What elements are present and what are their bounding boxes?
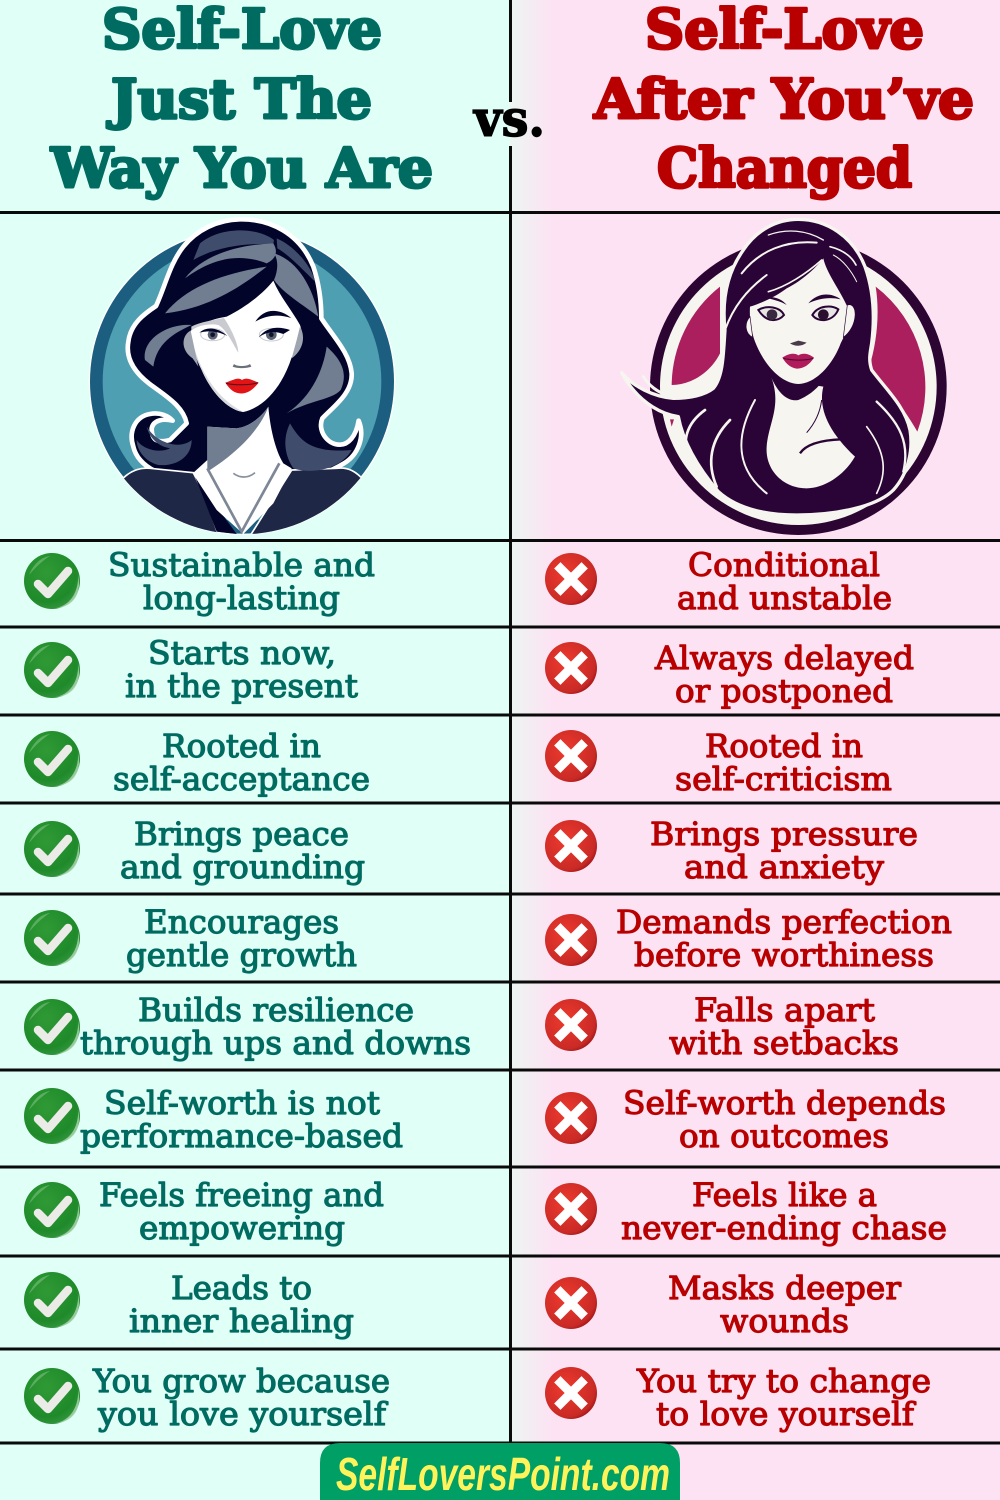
text: right — [623, 1084, 946, 1155]
text: left — [80, 1084, 403, 1155]
text: right: or postponed — [675, 672, 893, 710]
website text: SelfLoversPoint.com — [336, 1448, 670, 1500]
text: left: self-acceptance — [113, 760, 370, 798]
text: left — [120, 815, 365, 886]
text: left: through ups and downs — [80, 1024, 471, 1062]
icon: check — [24, 1272, 80, 1328]
text: right: on outcomes — [679, 1117, 889, 1155]
text: right — [675, 727, 892, 798]
heading: right title: Changed — [657, 136, 912, 200]
icon: cross — [545, 1277, 597, 1329]
icon: check — [24, 999, 80, 1055]
text: left: empowering — [139, 1209, 345, 1247]
eyes — [758, 307, 784, 320]
row 2 — [24, 634, 914, 710]
text: left: in the present — [125, 667, 358, 705]
heading: left title: Way You Are — [50, 136, 433, 200]
row 7 — [24, 1084, 946, 1155]
text: right — [621, 1176, 947, 1247]
text: right: Rooted in — [705, 727, 863, 765]
icon: cross — [545, 1183, 597, 1235]
text: right: wounds — [720, 1302, 849, 1340]
neck and chest — [767, 378, 855, 488]
text: left — [92, 1362, 390, 1433]
icon: check — [24, 910, 80, 966]
row 6 — [24, 991, 899, 1062]
text: left: performance-based — [80, 1117, 403, 1155]
vs label: vs. — [473, 89, 545, 148]
text: right: with setbacks — [669, 1024, 899, 1062]
icon: check — [24, 821, 80, 877]
heading: left title — [50, 0, 433, 200]
text: right — [669, 991, 899, 1062]
hair highlights — [193, 230, 274, 260]
text: left: long-lasting — [143, 579, 340, 617]
text: left: inner healing — [129, 1302, 354, 1340]
row 9 — [24, 1269, 902, 1340]
text: left: Rooted in — [162, 727, 321, 765]
jacket — [124, 467, 361, 534]
text: left: Leads to — [171, 1269, 312, 1307]
icon: cross — [545, 1367, 597, 1419]
text: right: self-criticism — [675, 760, 892, 798]
row 3 — [24, 727, 892, 798]
text: left: Encourages — [144, 903, 339, 941]
text: right — [668, 1269, 902, 1340]
icon: check — [24, 1182, 80, 1238]
icon: cross — [545, 914, 597, 966]
text: left: Builds resilience — [138, 991, 414, 1029]
panel: left column background — [0, 0, 510, 1500]
row 5 — [24, 903, 952, 974]
text: right: Conditional — [688, 546, 880, 584]
icon: check — [24, 1368, 80, 1424]
heading: right title — [593, 0, 974, 200]
heading: right title: After You’ve — [593, 67, 974, 131]
text: left: you love yourself — [97, 1395, 388, 1433]
face — [191, 281, 302, 412]
icon: cross — [545, 999, 597, 1051]
icon: cross — [545, 642, 597, 694]
portrait: woman with wavy hair in blue circle — [89, 219, 395, 543]
text: right — [654, 639, 914, 710]
text: left: Sustainable and — [108, 546, 375, 584]
text: right: Self-worth depends — [623, 1084, 946, 1122]
text: left — [126, 903, 357, 974]
text: right — [636, 1362, 931, 1433]
text: right: Demands perfection — [616, 903, 952, 941]
icon: check — [24, 642, 80, 698]
text: left: Brings peace — [134, 815, 349, 853]
icon: check — [24, 553, 80, 609]
text: right: to love yourself — [656, 1395, 916, 1433]
text: right: and anxiety — [684, 848, 884, 886]
row 4 — [24, 815, 918, 886]
portrait: woman with long hair in magenta circle — [622, 219, 947, 535]
icon: check — [24, 1088, 80, 1144]
panel: right column background — [510, 0, 1000, 1500]
hair highlights — [643, 231, 905, 493]
text: left — [99, 1176, 384, 1247]
lips — [782, 354, 814, 369]
icon: cross — [545, 820, 597, 872]
icon: cross — [545, 553, 597, 605]
text: left — [80, 991, 471, 1062]
text: left: You grow because — [92, 1362, 390, 1400]
icon: cross — [545, 730, 597, 782]
text: right — [650, 815, 918, 886]
text: right — [616, 903, 952, 974]
row 10 — [24, 1362, 931, 1433]
text: left: gentle growth — [126, 936, 357, 974]
text: right: and unstable — [677, 579, 892, 617]
text: right: never-ending chase — [621, 1209, 947, 1247]
heading: left title: Just The — [107, 67, 372, 131]
footer logo badge — [320, 1443, 680, 1500]
text: right: Masks deeper — [668, 1269, 902, 1307]
text: right: Brings pressure — [650, 815, 918, 853]
long hair — [622, 219, 911, 515]
icon: check — [24, 731, 80, 787]
neck and chest — [193, 407, 292, 534]
text: left — [108, 546, 375, 617]
row 1 — [24, 546, 892, 617]
text: right: Feels like a — [692, 1176, 877, 1214]
text: left — [113, 727, 370, 798]
text: right: You try to change — [636, 1362, 931, 1400]
face — [750, 258, 848, 384]
text: right: Falls apart — [694, 991, 875, 1029]
text: right: before worthiness — [634, 936, 934, 974]
text: left — [125, 634, 358, 705]
text: right: Always delayed — [654, 639, 914, 677]
text: left — [129, 1269, 354, 1340]
text: left: and grounding — [120, 848, 365, 886]
text: left: Self-worth is not — [104, 1084, 380, 1122]
text: right — [677, 546, 892, 617]
text: left: Starts now, — [148, 634, 336, 672]
icon: cross — [545, 1092, 597, 1144]
lips — [225, 379, 259, 393]
text: left: Feels freeing and — [99, 1176, 384, 1214]
row 8 — [24, 1176, 947, 1247]
eyes — [201, 329, 225, 341]
